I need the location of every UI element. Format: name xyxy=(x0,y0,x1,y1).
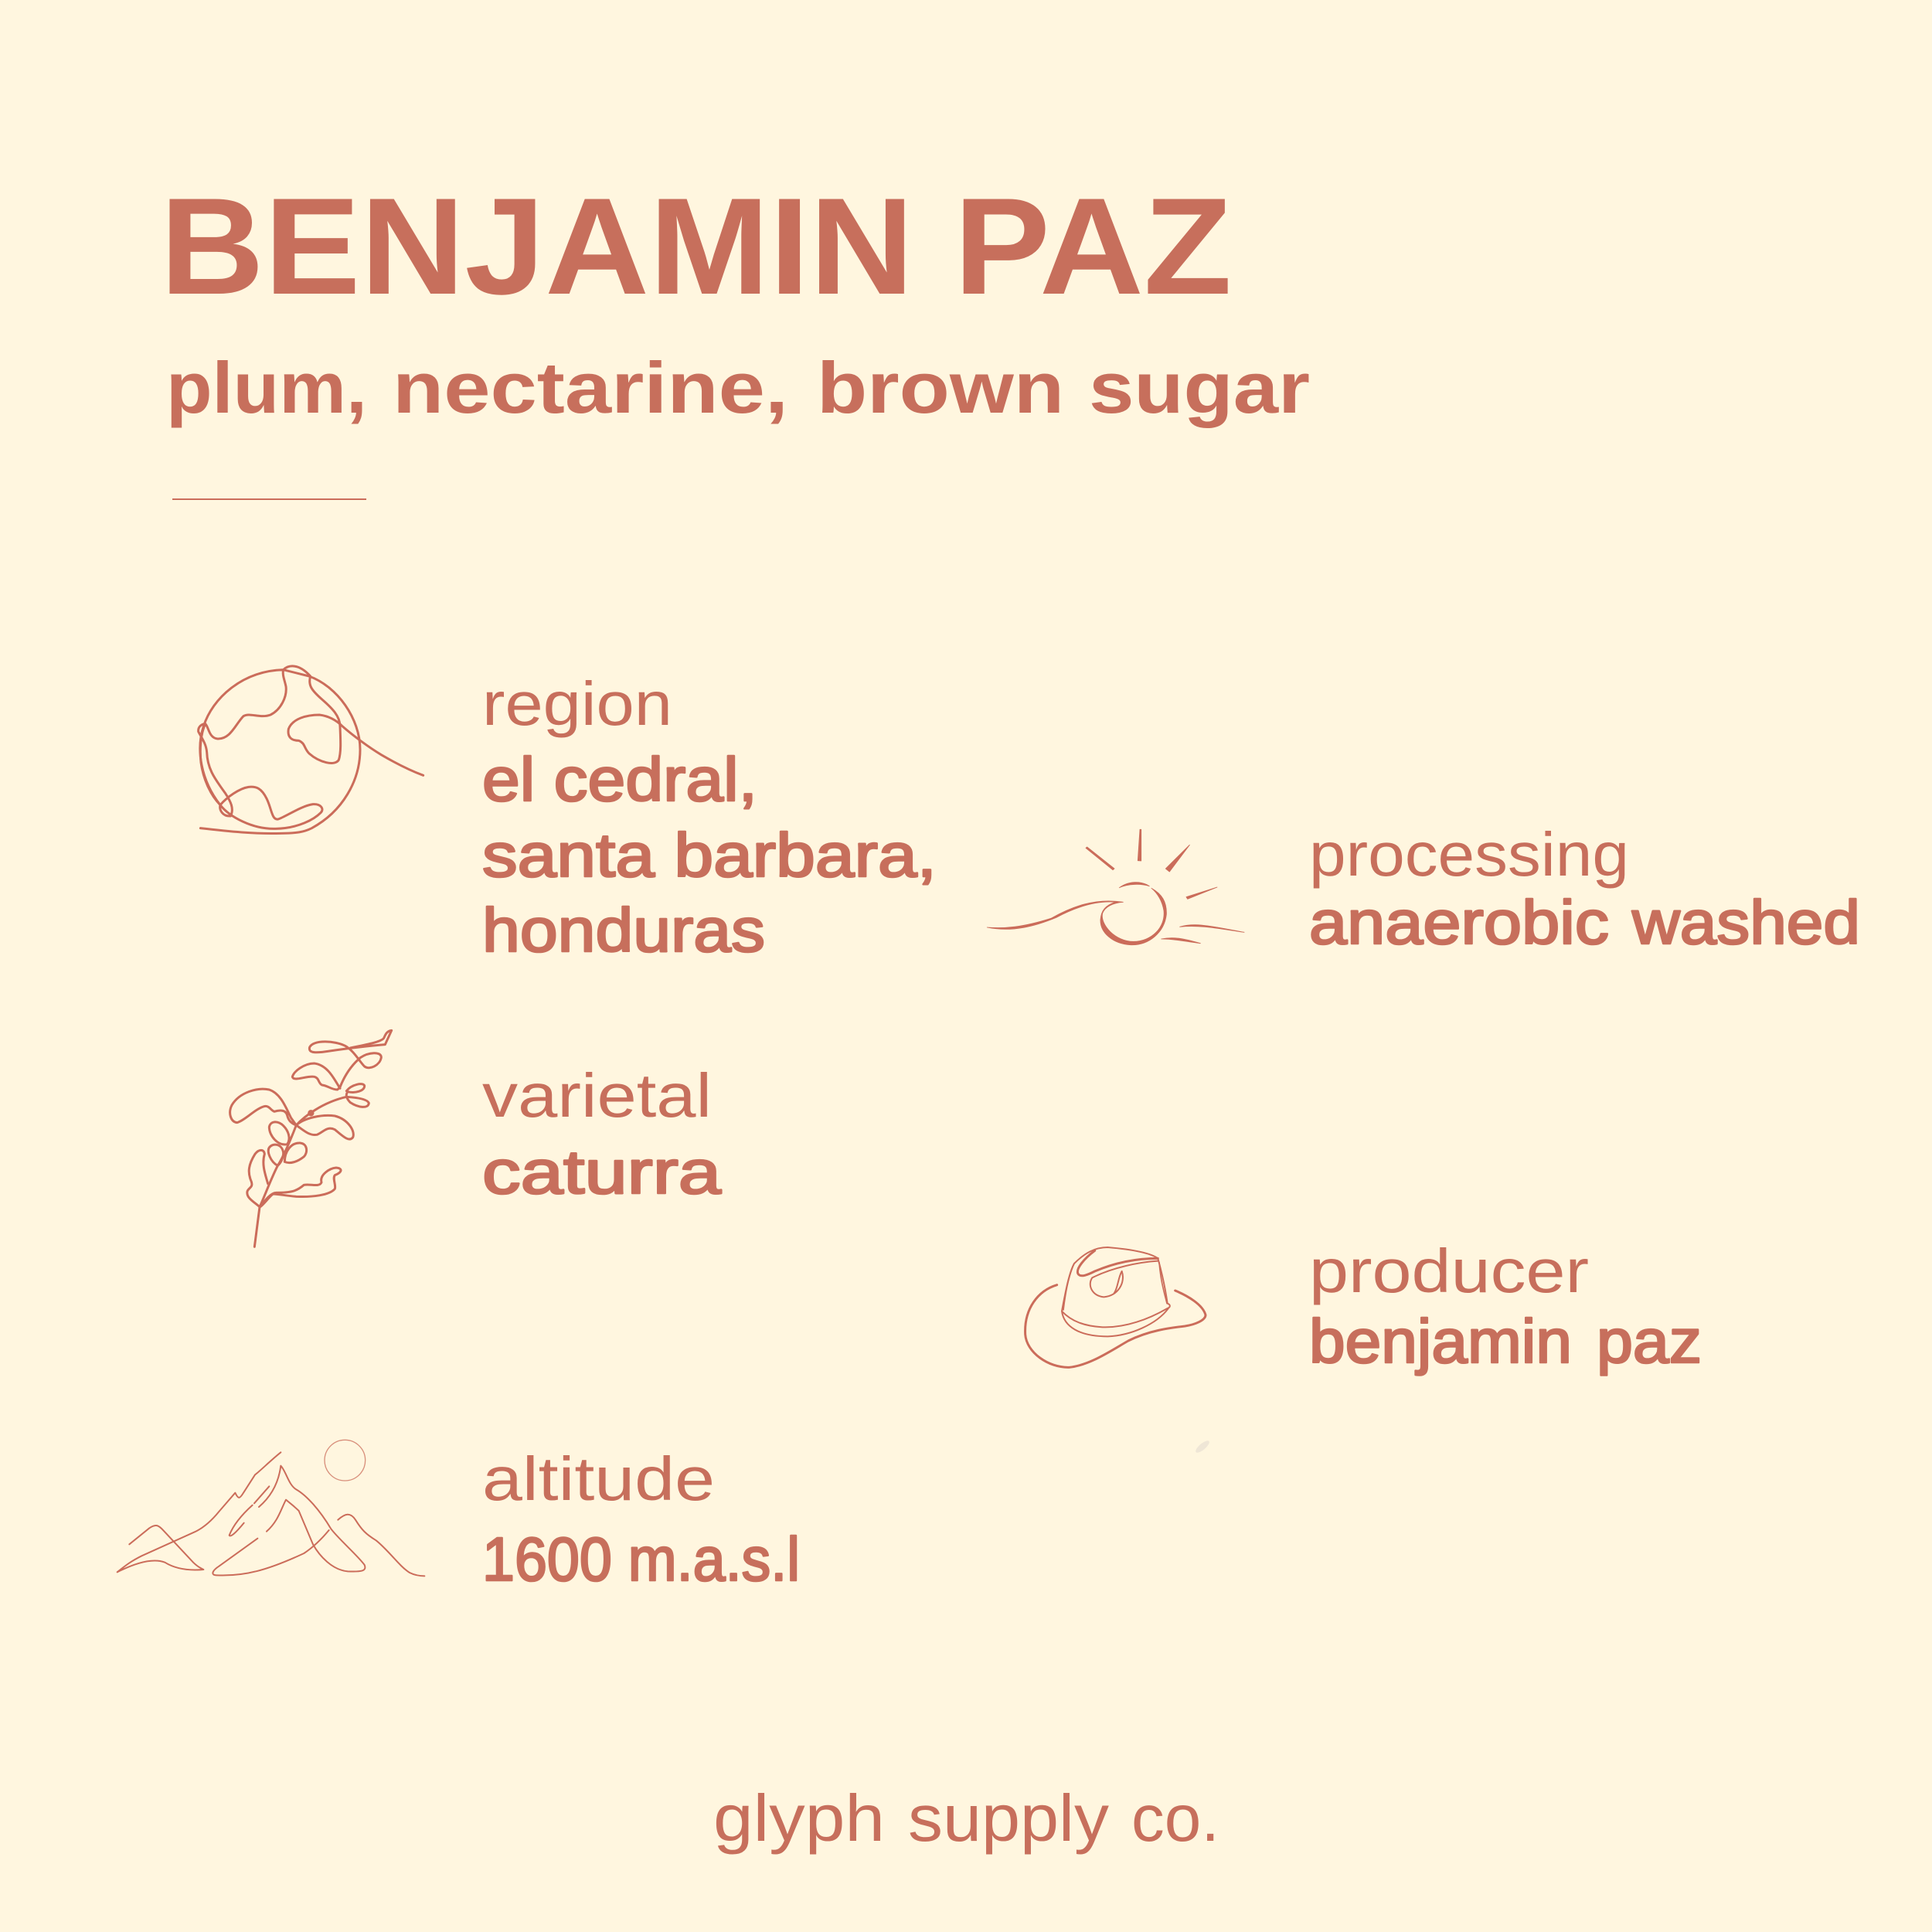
panel: region xyxy=(199,666,937,964)
value: varietal: caturra xyxy=(482,1138,722,1206)
footer brand xyxy=(713,1782,1219,1855)
subtitle: tasting notes: nectarine, xyxy=(393,347,788,428)
value: processing xyxy=(1309,888,1860,957)
icon: coffee branch xyxy=(230,1030,392,1247)
value: altitude: 1600 m.a.s.l xyxy=(482,1525,800,1594)
value: region: el cedral, xyxy=(482,745,757,814)
footer brand: supply xyxy=(908,1782,1110,1855)
label: region: region xyxy=(482,669,672,738)
title: BENJAMIN PAZ xyxy=(160,169,1232,323)
icon: wave and sun xyxy=(987,829,1244,945)
value: producer: benjamin xyxy=(1309,1307,1572,1376)
value: processing: anaerobic xyxy=(1309,888,1609,957)
subtitle: tasting notes xyxy=(166,347,1310,428)
panel: processing xyxy=(987,820,1860,957)
subtitle: tasting notes: plum, xyxy=(166,347,367,428)
value: region: honduras xyxy=(482,896,765,964)
label: altitude: altitude xyxy=(482,1444,715,1513)
value: region: santa barbara, xyxy=(482,821,937,889)
panel: altitude xyxy=(117,1440,800,1594)
panel: varietal xyxy=(230,1030,722,1247)
icon: globe xyxy=(199,666,423,834)
footer brand: co. xyxy=(1131,1782,1219,1855)
icon: mountains and sun xyxy=(117,1440,424,1576)
subtitle: tasting notes: sugar xyxy=(1089,347,1310,428)
icon: hat xyxy=(1026,1247,1206,1367)
value: processing: washed xyxy=(1631,888,1860,957)
value: producer xyxy=(1309,1307,1702,1376)
footer brand: glyph xyxy=(713,1782,885,1855)
value: region xyxy=(482,745,937,964)
panel: producer xyxy=(1026,1236,1702,1376)
label: processing: processing xyxy=(1309,820,1629,889)
value: producer: paz xyxy=(1597,1307,1702,1376)
subtitle: tasting notes: brown xyxy=(817,347,1064,428)
label: varietal: varietal xyxy=(482,1061,712,1130)
label: producer: producer xyxy=(1309,1236,1589,1305)
